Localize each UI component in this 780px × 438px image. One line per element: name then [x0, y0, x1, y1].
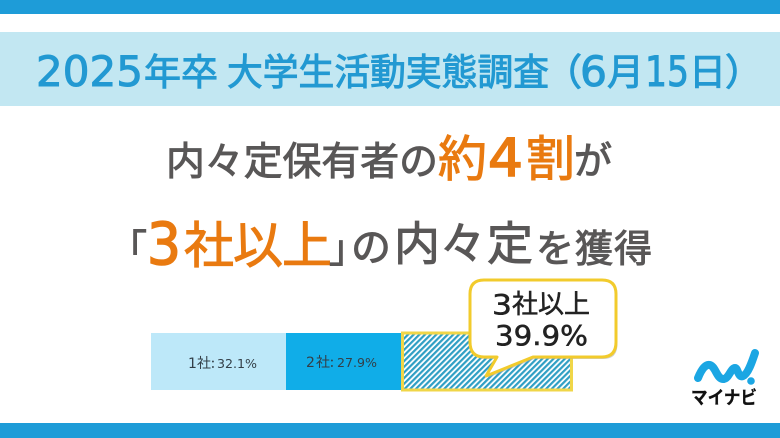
heading line 1	[166, 120, 612, 191]
heading line 2: 3	[147, 210, 181, 278]
heading line 1: 内々定保有者の	[166, 131, 438, 187]
heading line 2	[109, 206, 652, 278]
bottom band	[0, 423, 780, 438]
callout: 社以上	[512, 284, 590, 321]
heading line 2: の	[351, 215, 391, 273]
title banner	[0, 32, 780, 106]
heading line 1: 4	[488, 128, 523, 189]
title text: ）	[725, 42, 762, 96]
segment: 1 company	[151, 333, 286, 390]
callout: 39.9%	[495, 320, 588, 352]
heading line 1: が	[574, 130, 612, 185]
title text	[36, 42, 762, 96]
logo: Mynavi	[691, 353, 757, 410]
title text: （	[545, 42, 582, 96]
segment: 2 companies: 27.9%	[337, 355, 377, 370]
callout: 3	[492, 288, 512, 321]
title text: 年卒	[144, 42, 218, 96]
segment: 2 companies: 社:	[316, 352, 334, 372]
heading line 2: 内々定	[394, 208, 533, 274]
logo mark	[698, 353, 755, 385]
segment: 1 company: 社:	[197, 353, 215, 373]
logo text: マイナビ	[691, 384, 757, 410]
heading line 2: 」	[329, 218, 367, 273]
segment: 2 companies: 2	[306, 355, 315, 371]
title text: 15	[645, 47, 689, 96]
title text: 大学生活動実態調査	[227, 42, 549, 96]
title text: 6	[580, 47, 607, 96]
segment: 2 companies	[286, 333, 401, 390]
top band	[0, 0, 780, 14]
segment: 1 company: 32.1%	[217, 356, 257, 371]
title text: 月	[607, 42, 644, 96]
heading line 1: 約	[438, 120, 487, 191]
heading line 2: を獲得	[536, 218, 652, 273]
callout	[470, 280, 618, 378]
heading line 2: 「	[109, 218, 147, 273]
segment: 1 company: 1	[188, 356, 197, 372]
title text: 日	[689, 42, 726, 96]
heading line 2: 社以上	[184, 206, 332, 278]
stacked bar chart	[151, 333, 572, 390]
heading line 1: 割	[526, 120, 575, 191]
segment: 3 or more companies	[402, 333, 572, 390]
title text: 2025	[36, 47, 143, 96]
